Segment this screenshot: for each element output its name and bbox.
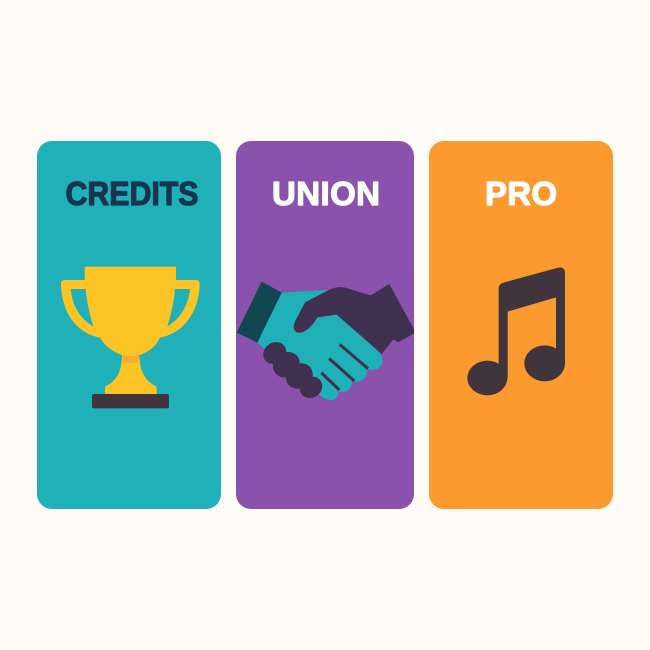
trophy base bbox=[92, 394, 169, 408]
card background: pro bbox=[429, 141, 613, 509]
icon: trophy bbox=[61, 267, 200, 408]
panel: credits bbox=[37, 141, 221, 509]
icon: handshake bbox=[237, 282, 414, 402]
panel: union bbox=[236, 141, 414, 509]
heading: credits: CREDITS bbox=[66, 175, 198, 212]
icon: music note bbox=[467, 268, 565, 395]
finger lines bbox=[321, 344, 368, 390]
fingers bbox=[259, 338, 326, 402]
card background: union bbox=[236, 141, 414, 509]
teal hand bbox=[257, 290, 383, 400]
trophy stem band bbox=[122, 355, 139, 363]
note head left bbox=[467, 361, 507, 395]
note head right bbox=[524, 345, 565, 381]
heading: pro: PRO bbox=[485, 175, 557, 212]
card background: credits bbox=[37, 141, 221, 509]
dark hand bbox=[294, 284, 414, 354]
dark cuff bbox=[237, 282, 282, 343]
panel: pro bbox=[429, 141, 613, 509]
heading: union: UNION bbox=[272, 175, 380, 212]
